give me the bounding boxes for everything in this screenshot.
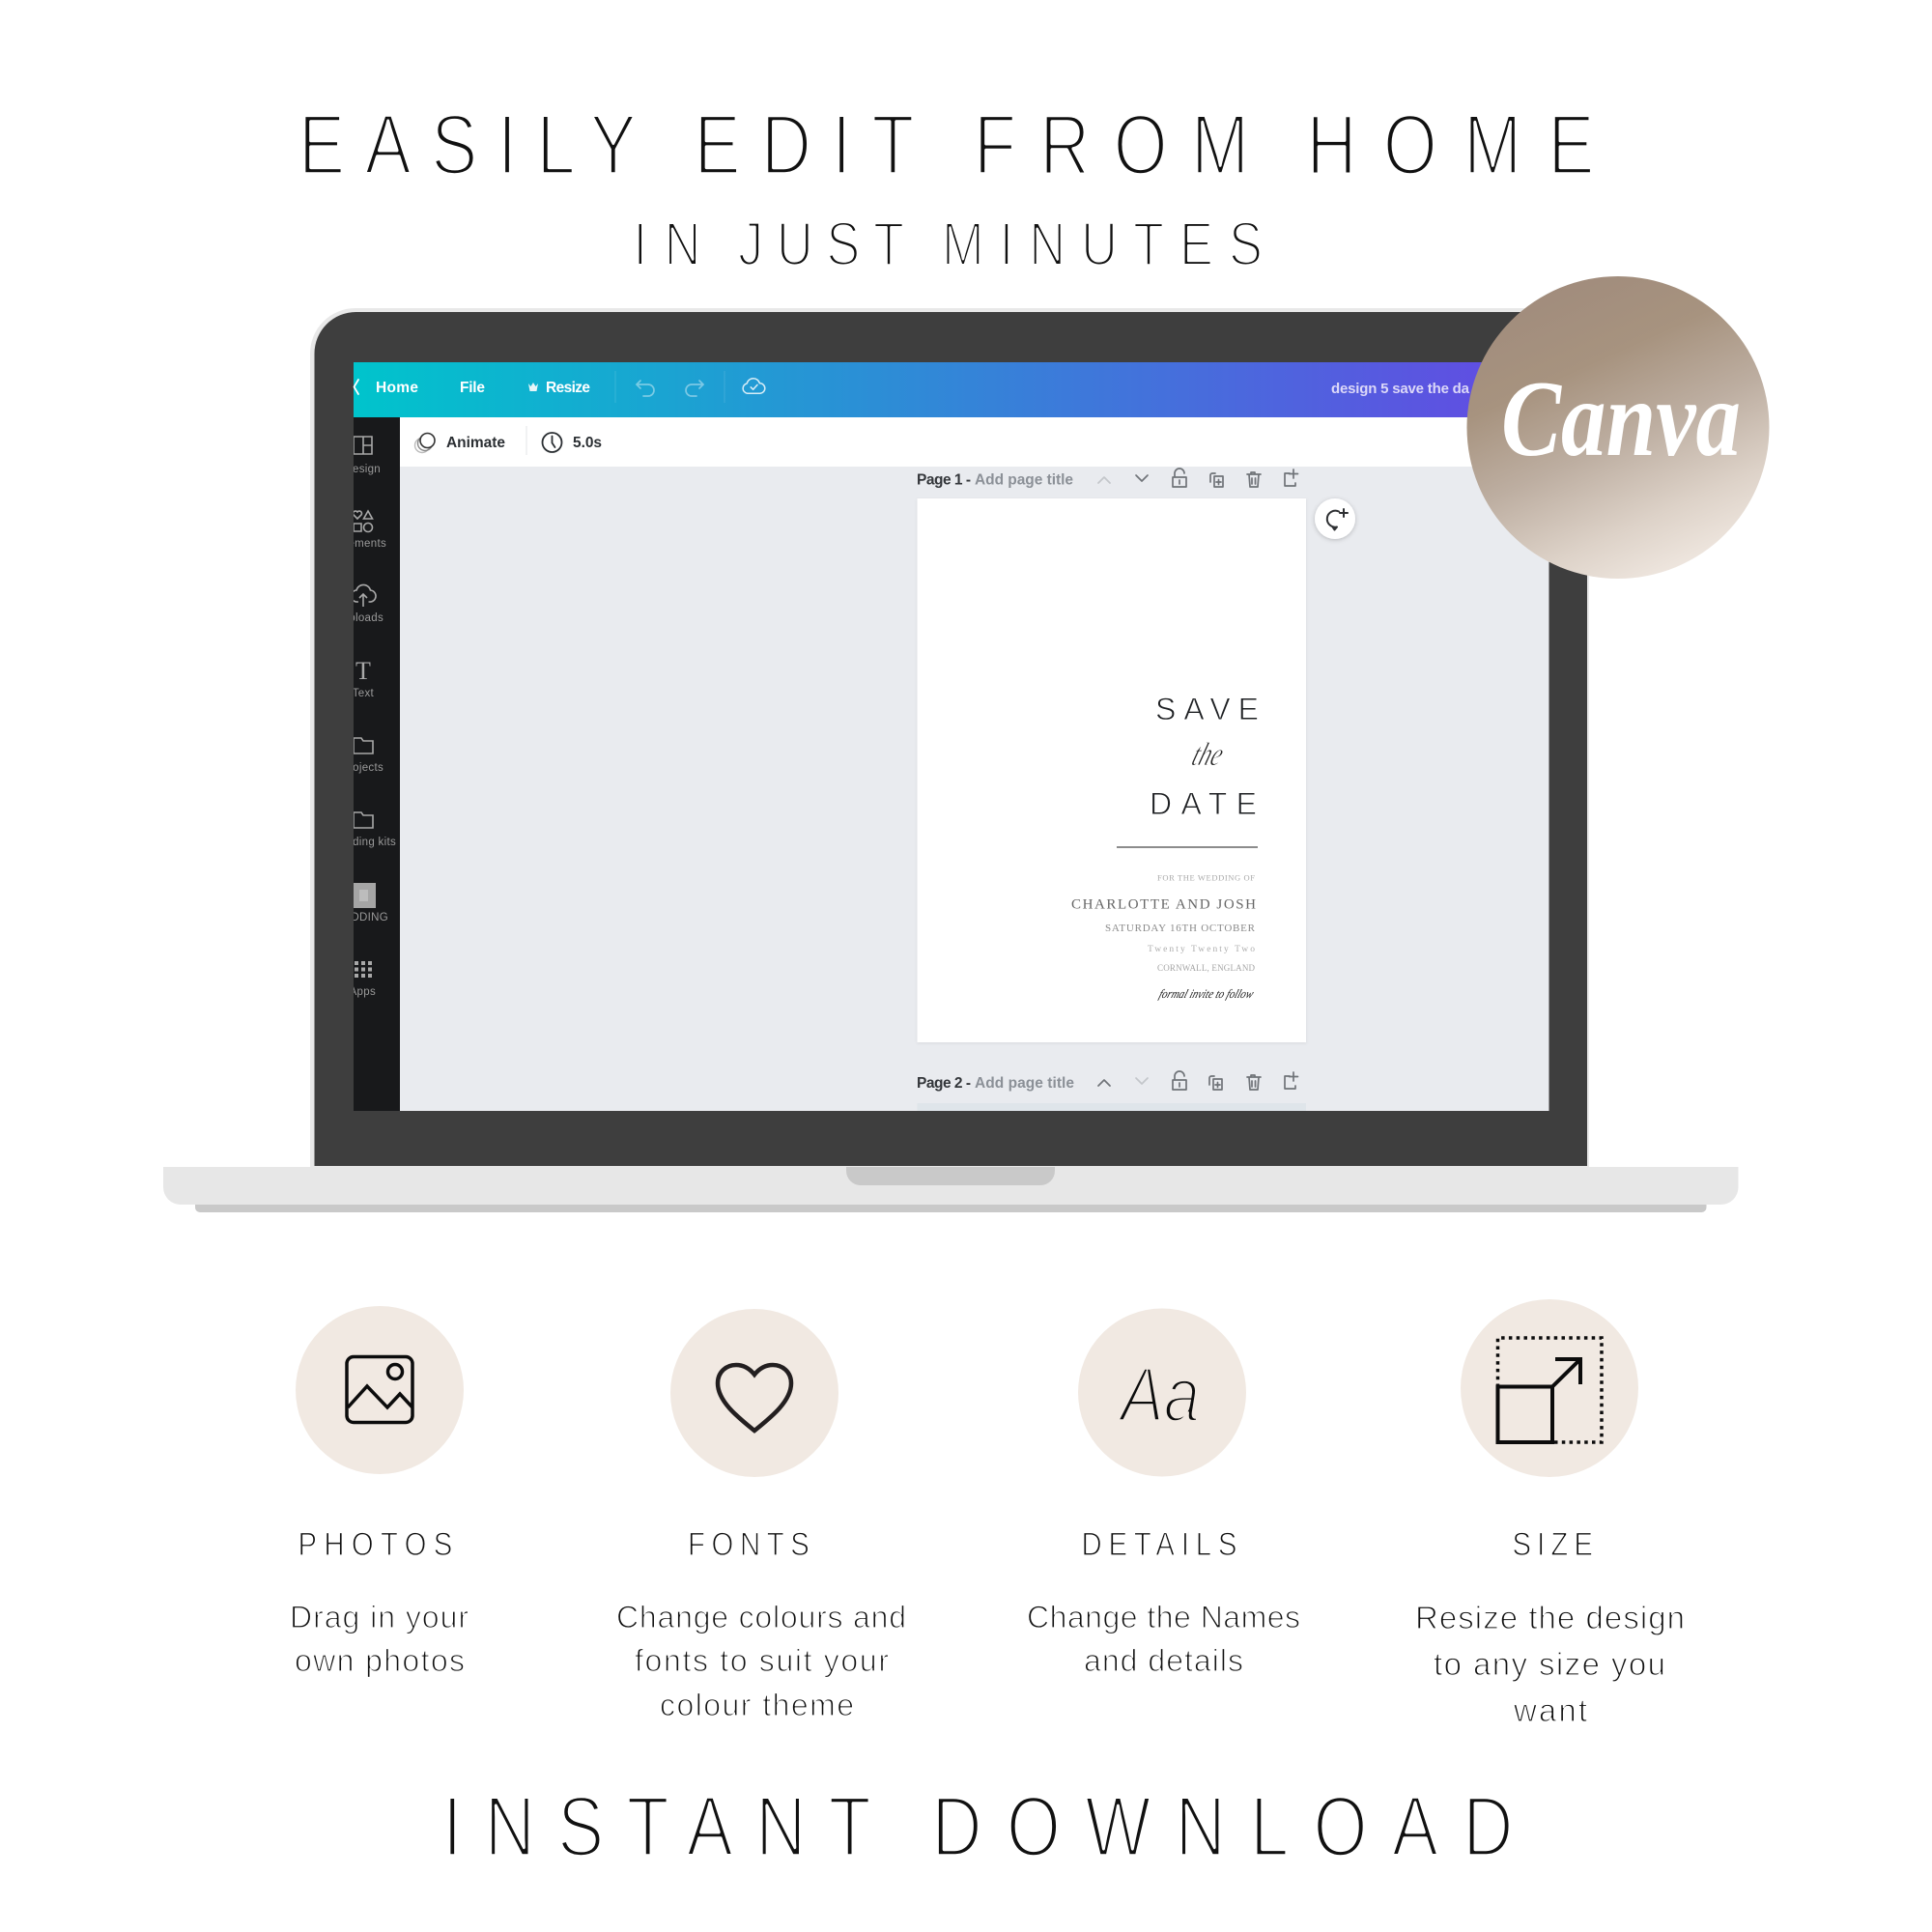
icon: photo <box>296 1306 464 1474</box>
page 2 preview strip <box>918 1103 1306 1111</box>
icon: redo <box>686 381 703 396</box>
uploads tab: Uploads <box>341 612 384 624</box>
icon: heart <box>670 1309 838 1477</box>
icon: clock <box>543 433 562 452</box>
feature: details <box>1027 1308 1300 1678</box>
title: EDIT <box>694 98 914 193</box>
animate label: Animate <box>446 435 505 451</box>
divider line <box>1117 846 1258 848</box>
icon: resize <box>1461 1299 1638 1477</box>
wedding folder tab <box>354 883 387 921</box>
description: fonts to suit your <box>635 1643 889 1678</box>
laptop notch <box>846 1167 1055 1185</box>
add comment button <box>1315 498 1355 539</box>
feature: fonts <box>616 1309 906 1722</box>
toolbar separator <box>526 426 527 455</box>
description: colour theme <box>660 1688 854 1722</box>
subtitle: MINUTES <box>942 211 1263 279</box>
description: Resize the design <box>1415 1600 1685 1635</box>
wedding folder tab: WEDDING <box>332 912 388 923</box>
elements tab <box>354 510 386 547</box>
top gradient bar <box>354 362 1549 417</box>
laptop base <box>163 1167 1739 1205</box>
page 1 design card <box>918 498 1306 1042</box>
wedding details: SATURDAY 16TH OCTOBER <box>1105 923 1256 934</box>
page 2 header: Page 2 - <box>917 1075 971 1092</box>
save heading: SAVE <box>1155 692 1259 726</box>
menu labels: File <box>460 380 485 396</box>
heading: FONTS <box>688 1525 810 1563</box>
dark sidebar <box>354 417 400 1111</box>
uploads tab <box>354 583 383 621</box>
description <box>290 1600 469 1678</box>
subtitle: IN <box>634 211 701 279</box>
menu labels <box>376 380 590 396</box>
apps tab <box>354 961 375 997</box>
text tab: Text <box>353 688 374 699</box>
laptop lid bezel <box>315 312 1587 1166</box>
laptop lid outer edge <box>310 308 1589 1167</box>
wedding details: CORNWALL, ENGLAND <box>1157 963 1256 973</box>
elements tab: Elements <box>338 538 386 550</box>
title: EASILY <box>298 98 637 193</box>
subtitle: JUST <box>738 211 904 279</box>
text tab <box>354 663 374 696</box>
description: and details <box>1084 1643 1243 1678</box>
page 1 header <box>917 469 1298 489</box>
design tab <box>354 436 380 475</box>
page 1 header: Add page title <box>975 471 1073 489</box>
description: Drag in your <box>290 1600 469 1634</box>
laptop foot <box>195 1205 1707 1212</box>
laptop mockup <box>163 308 1739 1212</box>
wedding details <box>1071 873 1256 1001</box>
script the: the <box>1187 736 1229 773</box>
icon: animate <box>415 433 435 452</box>
workspace background <box>400 467 1549 1111</box>
design tab: Design <box>344 464 381 475</box>
duration: 5.0s <box>573 435 602 451</box>
projects tab: Projects <box>341 762 384 774</box>
title: HOME <box>1307 98 1594 193</box>
document name: design 5 save the da <box>1331 381 1470 397</box>
heading: DETAILS <box>1082 1525 1236 1563</box>
page 2 header <box>917 1071 1298 1092</box>
animation toolbar <box>400 417 1549 467</box>
description <box>1027 1600 1300 1678</box>
icon: typeface: Aa <box>1118 1351 1200 1437</box>
date heading: DATE <box>1150 786 1257 821</box>
icon: crown <box>528 383 538 391</box>
apps tab: Apps <box>350 986 376 998</box>
icon: cloud saved <box>743 379 765 393</box>
icon: undo <box>637 381 654 396</box>
canva editor screen <box>329 362 1549 1111</box>
feature: size <box>1415 1299 1685 1728</box>
heading: PHOTOS <box>298 1525 452 1563</box>
description <box>616 1600 906 1722</box>
wedding kits tab: Wedding kits <box>329 837 396 848</box>
wedding kits tab <box>354 811 396 848</box>
menu separators <box>615 371 724 403</box>
icon: typeface <box>1078 1308 1246 1476</box>
title: FROM <box>974 98 1249 193</box>
page 1 header: Page 1 - <box>917 471 971 489</box>
footer heading: DOWNLOAD <box>931 1779 1513 1875</box>
back chevron <box>354 380 358 394</box>
projects tab <box>354 737 383 773</box>
description <box>1415 1600 1685 1728</box>
description: Change the Names <box>1027 1600 1300 1634</box>
feature: photos <box>290 1306 469 1678</box>
canva badge: Canva <box>1501 359 1741 479</box>
description: want <box>1513 1692 1587 1728</box>
heading: SIZE <box>1513 1525 1593 1563</box>
menu labels: Resize <box>546 380 590 396</box>
description: Change colours and <box>616 1600 906 1634</box>
wedding details: FOR THE WEDDING OF <box>1157 873 1255 883</box>
wedding details: formal invite to follow <box>1157 986 1256 1001</box>
description: own photos <box>295 1643 465 1678</box>
menu labels: Home <box>376 380 418 396</box>
text tab: T <box>355 657 371 685</box>
wedding details: Twenty Twenty Two <box>1148 945 1255 954</box>
footer heading: INSTANT <box>442 1779 871 1875</box>
canva badge <box>1466 276 1770 579</box>
wedding details: CHARLOTTE AND JOSH <box>1071 896 1256 912</box>
page 2 header: Add page title <box>975 1075 1074 1092</box>
description: to any size you <box>1434 1646 1665 1682</box>
